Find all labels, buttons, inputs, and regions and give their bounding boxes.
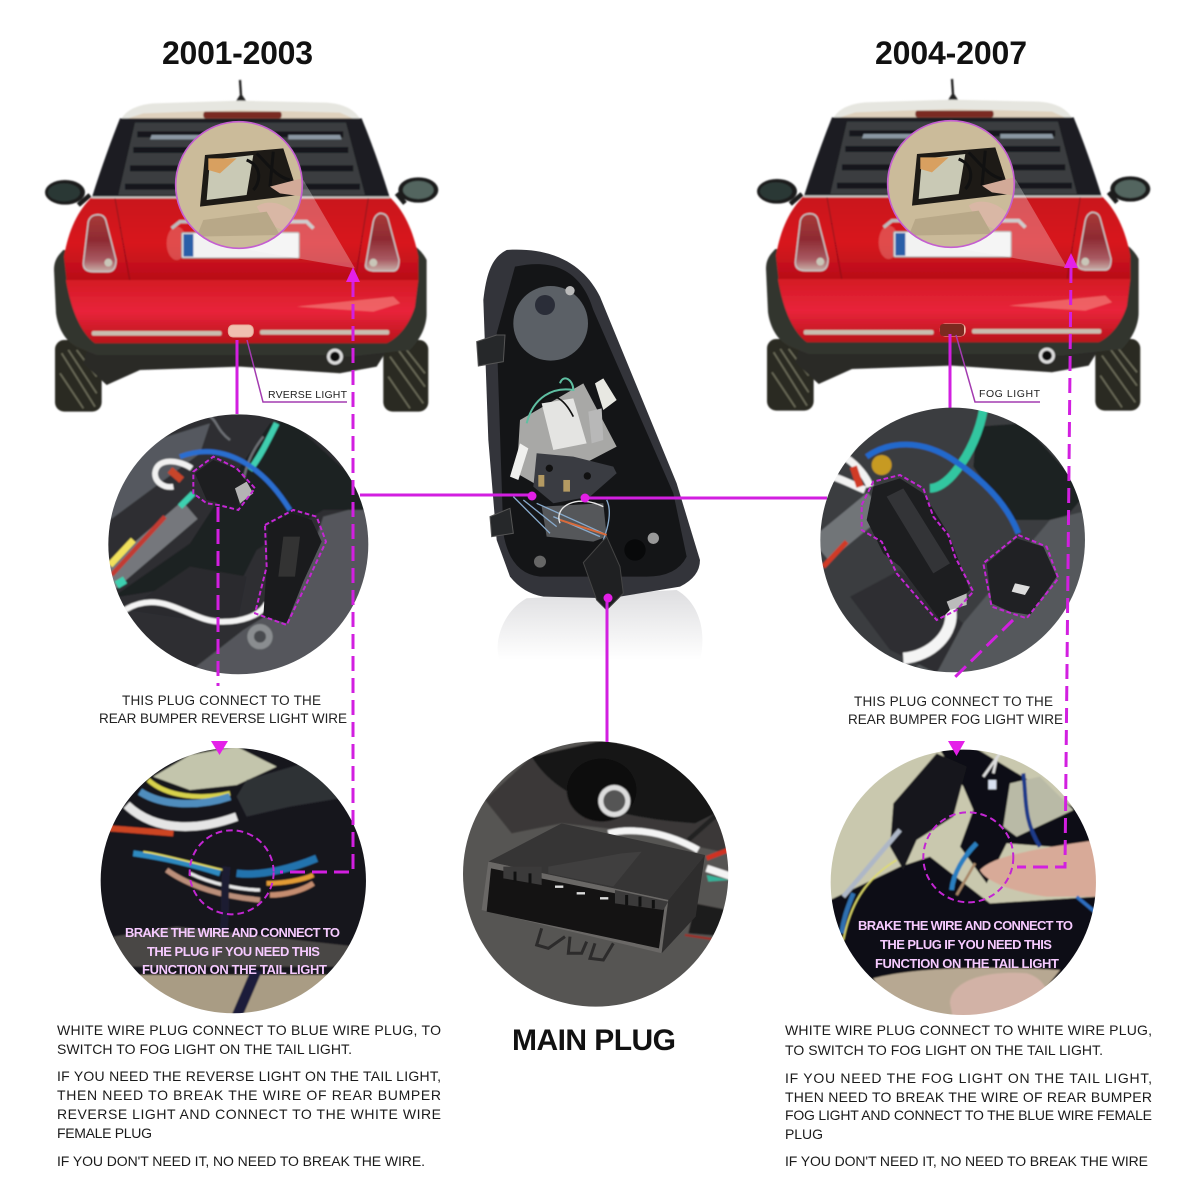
- tail light: rear of lamp unit: [477, 250, 702, 660]
- clips: [477, 335, 505, 366]
- label: reverse light: RVERSE LIGHT: [268, 389, 348, 401]
- tail lights: [83, 215, 116, 272]
- connector: reverse light wire: [236, 340, 238, 414]
- car: left rear view: [45, 80, 438, 412]
- connector: right plug to lamp: [585, 496, 827, 500]
- plug: [583, 537, 623, 610]
- text: right instructions: THEN NEED TO BREAK THE WIRE OF REAR BUMPER: [785, 1089, 1152, 1105]
- text: left instructions: FEMALE PLUG: [57, 1125, 152, 1141]
- caption in photo: BRAKE THE WIRE AND CONNECT TO: [858, 918, 1073, 933]
- caption in photo: BRAKE THE WIRE AND CONNECT TO: [125, 925, 340, 940]
- text: right instructions: IF YOU DON'T NEED IT, NO NEED TO BREAK THE WIRE: [785, 1153, 1148, 1169]
- text: left instructions: WHITE WIRE PLUG CONNECT TO BLUE WIRE PLUG, TO: [57, 1022, 441, 1038]
- antenna: [236, 80, 244, 95]
- arrow: right down to splice: [948, 741, 965, 756]
- arrow: left tail light: [346, 267, 360, 282]
- text: right plug note: [848, 694, 1063, 727]
- label: fog light: FOG LIGHT: [979, 388, 1041, 400]
- text: left instructions: SWITCH TO FOG LIGHT ON THE TAIL LIGHT.: [57, 1041, 352, 1057]
- connector: main plug line: [606, 598, 608, 742]
- title: 2001-2003: 2001-2003: [162, 35, 313, 71]
- inset circle: wiring in trunk: [173, 120, 307, 253]
- rear window louvres: [118, 123, 365, 195]
- text: left instructions: IF YOU NEED THE REVERSE LIGHT ON THE TAIL LIGHT,: [57, 1068, 441, 1084]
- text: right instructions: [785, 1022, 1152, 1169]
- magnifier cone: [240, 180, 355, 268]
- dashed link: left plug to splice: [216, 507, 220, 686]
- underbody: [83, 340, 393, 385]
- text: left plug note: THIS PLUG CONNECT TO THE: [122, 693, 321, 708]
- caption in photo: FUNCTION ON THE TAIL LIGHT: [142, 962, 327, 977]
- text: right plug note: THIS PLUG CONNECT TO THE: [854, 694, 1053, 709]
- socket plate: [533, 453, 617, 503]
- photo: 2001-2003 plugs: [103, 410, 377, 677]
- caption in photo: [125, 925, 340, 977]
- leader: fog light: [956, 335, 1040, 402]
- brake light: [203, 112, 282, 118]
- electronics: [517, 383, 617, 487]
- bulb cap: [513, 286, 588, 361]
- roof and cabin: [120, 101, 362, 122]
- caption in photo: THE PLUG IF YOU NEED THIS: [880, 937, 1052, 952]
- title: 2004-2007: 2004-2007: [875, 35, 1027, 71]
- car: right rear view: [757, 79, 1150, 411]
- arrow: left down to splice: [211, 741, 228, 755]
- photo: 2004-2007 plugs: [817, 403, 1093, 680]
- licence plate: [182, 233, 299, 258]
- caption in photo: THE PLUG IF YOU NEED THIS: [147, 944, 320, 959]
- caption in photo: [858, 918, 1073, 971]
- mirrors: [78, 193, 405, 205]
- wires: [513, 497, 609, 540]
- body: [64, 197, 418, 280]
- text: left instructions: REVERSE LIGHT AND CONNECT TO THE WHITE WIRE: [57, 1106, 441, 1122]
- bumper sides: [54, 245, 427, 357]
- text: left plug note: REAR BUMPER REVERSE LIGHT WIRE: [99, 711, 347, 726]
- text: left instructions: IF YOU DON'T NEED IT, NO NEED TO BREAK THE WIRE.: [57, 1153, 425, 1169]
- text: right instructions: PLUG: [785, 1126, 823, 1142]
- bumper trim: [92, 331, 222, 336]
- connector: left plug to lamp: [360, 494, 532, 496]
- exhaust: [327, 349, 343, 365]
- text: right instructions: TO SWITCH TO FOG LIGHT ON THE TAIL LIGHT.: [785, 1042, 1103, 1058]
- photo: left wire splice: [97, 743, 373, 1020]
- bumper: [66, 280, 418, 343]
- connector: fog light wire: [948, 334, 952, 408]
- photo: main plug: [462, 740, 735, 1010]
- housing: [483, 250, 700, 598]
- connection dots on lamp: [528, 492, 612, 602]
- text: right instructions: FOG LIGHT AND CONNECT TO THE BLUE WIRE FEMALE: [785, 1107, 1152, 1123]
- reflection: [498, 590, 702, 660]
- leader: reverse light: [247, 340, 347, 402]
- dashed link: left tail light: [280, 282, 353, 872]
- text: left plug note: [99, 693, 347, 726]
- photo: right wire splice: [827, 747, 1103, 1023]
- text: left instructions: [57, 1022, 441, 1169]
- fog lamp: [228, 325, 253, 337]
- dashed link: right plug to splice: [952, 620, 1013, 680]
- text: left instructions: THEN NEED TO BREAK THE WIRE OF REAR BUMPER: [57, 1087, 441, 1103]
- fog lamp: dark housing on right car: [940, 324, 964, 336]
- text: right instructions: WHITE WIRE PLUG CONNECT TO WHITE WIRE PLUG,: [785, 1022, 1152, 1038]
- plug body: [488, 823, 705, 900]
- dashed link: right tail light: [1017, 268, 1071, 867]
- text: right instructions: IF YOU NEED THE FOG LIGHT ON THE TAIL LIGHT,: [785, 1070, 1152, 1086]
- tyres: [55, 340, 102, 412]
- arrow: right tail light: [1064, 253, 1078, 268]
- wire loom base: [542, 503, 607, 542]
- text: right plug note: REAR BUMPER FOG LIGHT WIRE: [848, 712, 1063, 727]
- caption in photo: FUNCTION ON THE TAIL LIGHT: [875, 956, 1059, 971]
- title: main plug: MAIN PLUG: [512, 1024, 676, 1057]
